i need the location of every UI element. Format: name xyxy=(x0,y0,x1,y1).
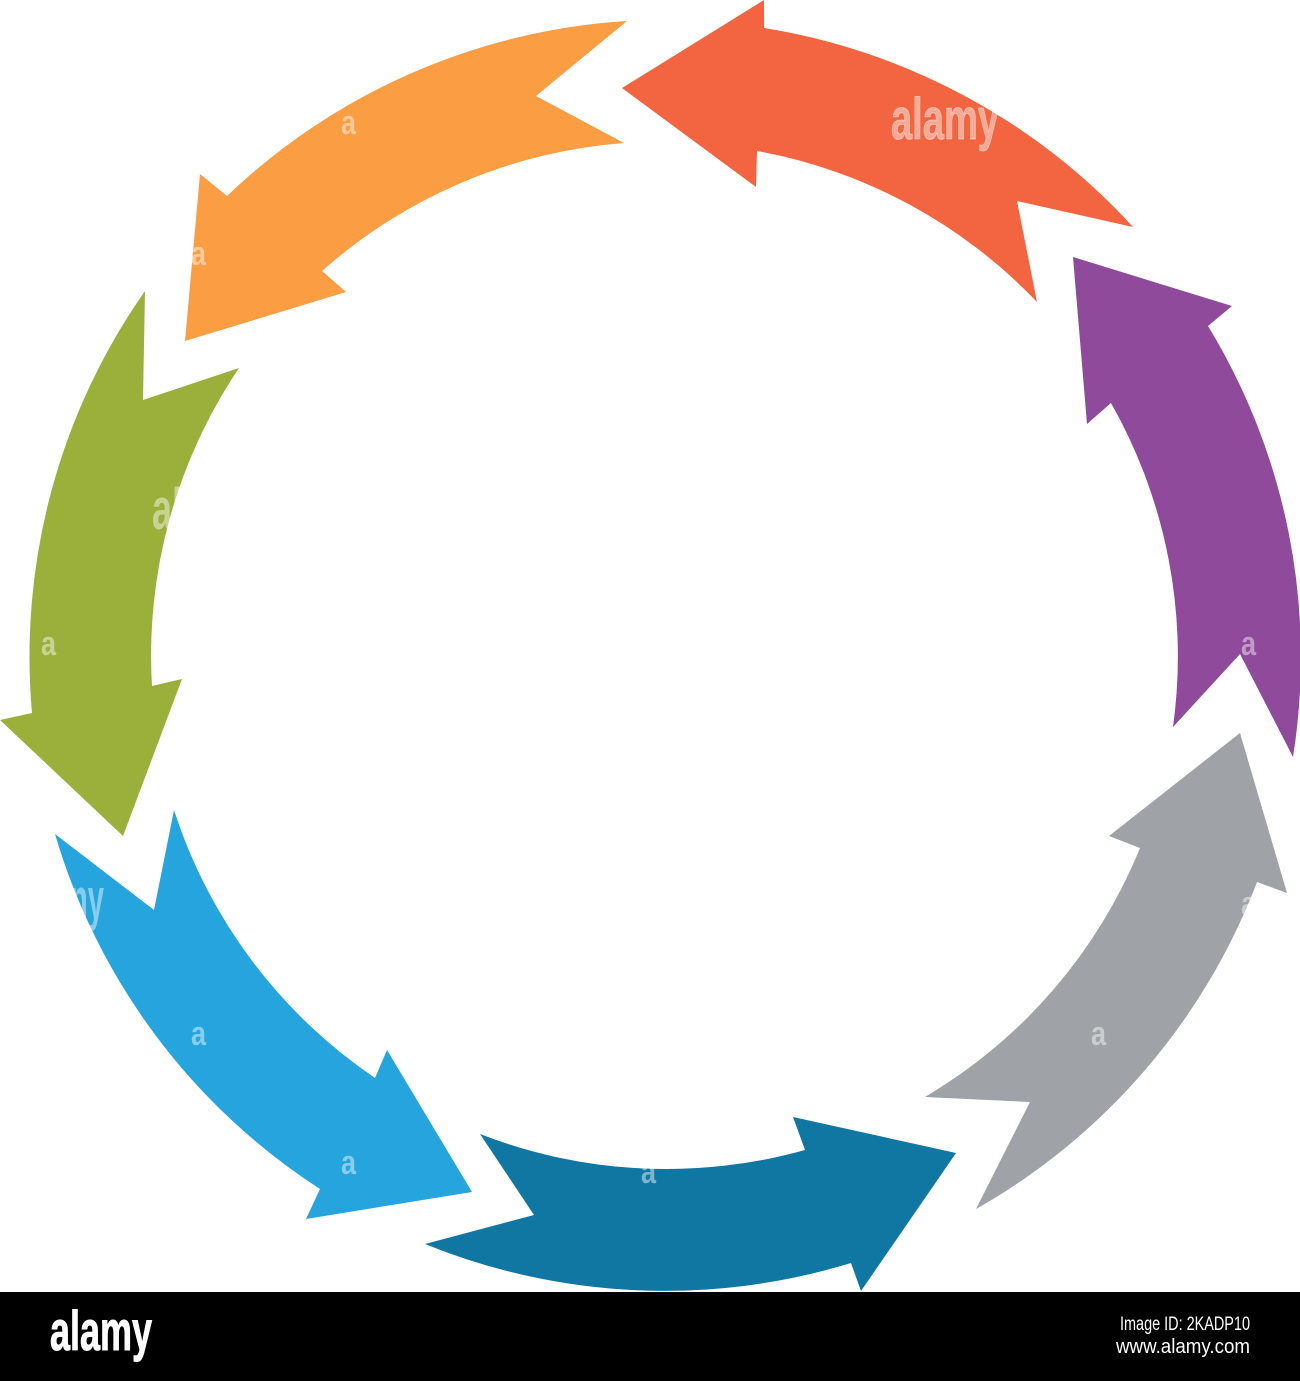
watermark: green letter: a xyxy=(41,625,57,663)
watermark: orange letter: a xyxy=(341,104,357,142)
watermark: blue letter lower: a xyxy=(341,1144,357,1182)
website: www.alamy.com xyxy=(1115,1336,1250,1358)
watermarks xyxy=(41,87,1257,1191)
footer logo: alamy xyxy=(50,1299,152,1362)
arrow: light blue xyxy=(55,810,472,1219)
footer bar xyxy=(0,1292,1300,1381)
watermark: orange edge letter: a xyxy=(191,235,207,273)
arrow: red xyxy=(622,0,1133,302)
arrow: purple xyxy=(1073,257,1300,757)
watermark: blue letter upper: a xyxy=(191,1015,207,1053)
watermark: gray letter upper: a xyxy=(1241,885,1257,923)
watermark: purple letter: a xyxy=(1241,625,1257,663)
arrow: gray xyxy=(925,733,1287,1209)
image id: Image ID: 2KADP10 xyxy=(1120,1314,1250,1335)
arrow: dark blue xyxy=(425,1117,956,1291)
arrow: orange xyxy=(185,21,627,341)
watermark: dark blue letter: a xyxy=(641,1153,657,1191)
watermark: green partial: al xyxy=(152,477,182,542)
arrow: green xyxy=(0,291,239,836)
watermark: gray letter lower: a xyxy=(1091,1015,1107,1053)
watermark: blue partial: ny xyxy=(70,867,104,932)
watermark: alamy on red arrow: alamy xyxy=(891,87,999,152)
